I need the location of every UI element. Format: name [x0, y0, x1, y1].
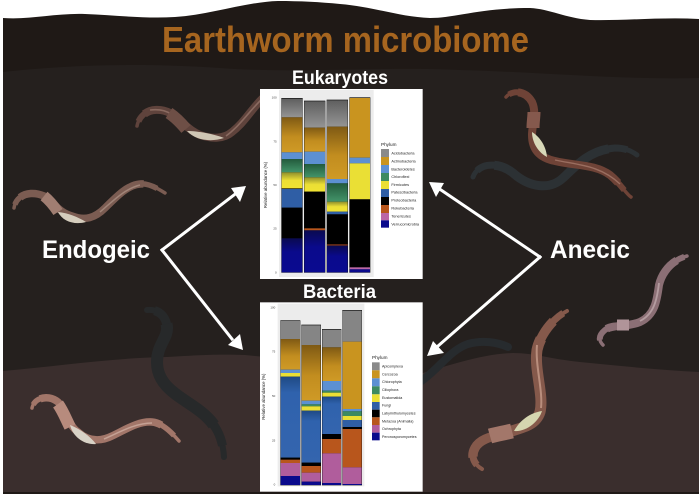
axis labels: 25	[273, 227, 277, 231]
legend: Fungi	[382, 404, 391, 408]
legend: Rokubacteria	[391, 207, 415, 211]
y axis title: Relative abundance (%)	[261, 373, 266, 420]
arrow: Anecic to Bacteria	[427, 257, 540, 356]
worm: faded shadow upper right	[473, 148, 637, 186]
background: middle soil layer	[3, 65, 699, 380]
worm: faded shadow behind bacteria chart	[420, 342, 508, 382]
legend: Firmicutes	[391, 183, 409, 187]
legend: Eustomatida	[382, 396, 403, 400]
legend: Peronosporomycetes	[382, 435, 417, 439]
legend: Phylum	[372, 355, 388, 360]
chart: Bacteria stacked bars	[260, 302, 423, 492]
clitellum	[490, 431, 512, 436]
heading: Bacteria: Bacteria	[303, 282, 376, 303]
legend: Labyrinthulomycetes	[382, 412, 416, 416]
axis labels: 100	[270, 305, 276, 309]
axis labels: 50	[272, 394, 276, 398]
y axis title: Relative abundance (%)	[263, 161, 268, 208]
heading: Eukaryotes: Eukaryotes	[292, 68, 388, 89]
legend: Proteobacteria	[391, 199, 417, 203]
bar 1	[280, 320, 300, 485]
legend: Ochrophyta	[382, 427, 402, 431]
legend: Metazoa (Animalia)	[382, 419, 413, 423]
axis labels: 100	[272, 96, 277, 100]
arrow: Anecic to Eukaryotes	[429, 182, 540, 257]
clitellum	[617, 320, 629, 330]
label: Endogeic: Endogeic	[42, 236, 150, 264]
legend: Chloroflexi	[391, 175, 410, 179]
worm: lower right large	[473, 311, 567, 469]
patch	[58, 212, 86, 223]
label: Anecic: Anecic	[550, 236, 630, 264]
axis labels: 75	[272, 350, 276, 354]
chart: Eukaryotes stacked bars	[260, 89, 423, 279]
patch	[187, 131, 224, 140]
bar 4	[342, 310, 362, 485]
legend	[372, 355, 417, 440]
axis labels: 75	[273, 139, 277, 143]
axis labels: 0	[274, 483, 276, 487]
legend: Apicomplexa	[382, 364, 404, 368]
legend: Verrucomicrobia	[391, 222, 420, 226]
legend	[381, 142, 420, 228]
clitellum	[58, 404, 70, 427]
axis labels: 50	[273, 183, 277, 187]
legend: Chlorophyta	[382, 380, 403, 384]
axis labels: 25	[272, 438, 276, 442]
arrow: Endogeic to Bacteria	[162, 250, 243, 350]
bar 1	[281, 98, 303, 273]
bar 4	[349, 97, 370, 273]
worm: bottom left	[32, 398, 179, 444]
bar 3	[322, 329, 341, 485]
axis labels	[270, 305, 276, 487]
worm: upper right mauve	[600, 256, 687, 345]
legend: Tenericutes	[391, 215, 411, 219]
legend: Patescibacteria	[391, 191, 418, 195]
patch	[514, 411, 542, 431]
worm: top left	[137, 97, 264, 140]
bar 2	[301, 325, 321, 485]
title: Earthworm microbiome	[162, 19, 529, 60]
legend: Ciliophora	[382, 388, 399, 392]
clitellum	[533, 112, 534, 128]
worm: left endogeic	[14, 184, 165, 223]
legend: Cercozoa	[382, 372, 399, 376]
patch	[532, 132, 547, 157]
patch	[70, 425, 96, 444]
background: lower soil layer	[3, 353, 699, 492]
axis labels	[272, 96, 277, 274]
clitellum	[169, 113, 186, 129]
worm: top right anecic	[506, 92, 631, 197]
bar 2	[304, 101, 325, 273]
bar 3	[327, 100, 348, 273]
axis labels: 0	[275, 270, 277, 274]
arrow: Endogeic to Eukaryotes	[162, 186, 246, 250]
legend: Bacteroidetes	[391, 167, 415, 171]
legend: Acidobacteria	[391, 151, 415, 155]
worm: faded shadow lower left	[147, 310, 224, 457]
clitellum	[44, 196, 58, 212]
legend: Actinobacteria	[391, 159, 416, 163]
legend: Phylum	[381, 142, 397, 147]
